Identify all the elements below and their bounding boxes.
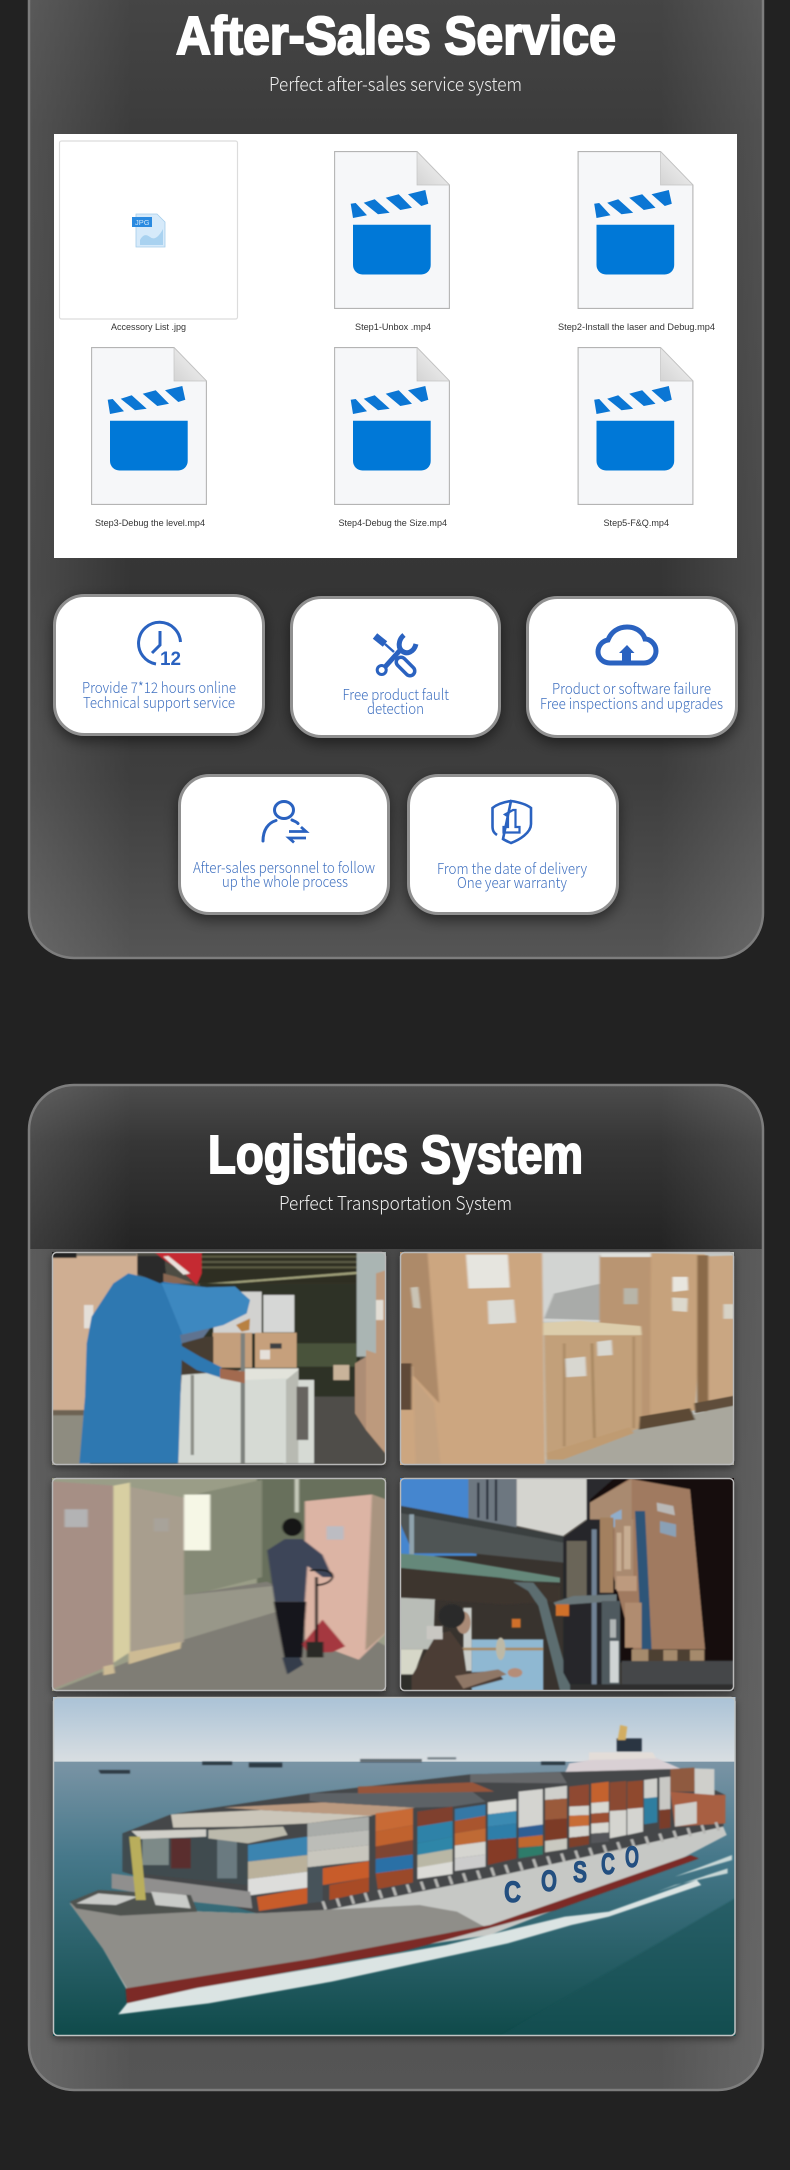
card text: up the whole process [222, 871, 348, 892]
card text: One year warranty [457, 872, 568, 893]
icon: person with arrows [263, 802, 306, 842]
title: Logistics System: Logistics System [208, 1125, 583, 1185]
icon: shield one [492, 801, 531, 843]
file: step 4: Step4-Debug the Size.mp4 [338, 518, 447, 529]
subtitle: Perfect Transportation System [279, 1189, 512, 1216]
icon: tools [375, 635, 416, 674]
file: step 1 [335, 152, 449, 333]
card text: Technical support service [83, 692, 235, 713]
file: step 5 [578, 348, 693, 529]
card: personnel follow up [180, 776, 388, 914]
icon: cloud upload [598, 627, 656, 665]
file: step 4 [335, 348, 449, 529]
subtitle: Perfect after-sales service system [269, 70, 522, 97]
panel: after-sales service [29, 0, 763, 958]
card text [82, 677, 236, 713]
icon: clock 12: 12 [160, 649, 181, 670]
ship name lettering: S [573, 1856, 587, 1889]
ship name lettering [504, 1841, 639, 1909]
photo: forklift loading crate [397, 1476, 737, 1693]
file: step 1: Step1-Unbox .mp4 [355, 322, 431, 333]
card: warranty [408, 776, 618, 914]
file: step 5: Step5-F&Q.mp4 [604, 518, 669, 529]
caption: Accessory List .jpg [111, 322, 186, 333]
file: step 3: Step3-Debug the level.mp4 [95, 518, 205, 529]
card text [437, 858, 588, 893]
card text: detection [367, 698, 424, 719]
file: step 2 [558, 152, 715, 333]
photo: worker with pallet truck [48, 1474, 391, 1693]
ship name lettering: C [601, 1848, 615, 1881]
panel: logistics system [29, 1085, 763, 2090]
card: technical support [54, 596, 264, 734]
card text: After-sales personnel to follow [193, 857, 375, 878]
card text: Free inspections and upgrades [540, 693, 723, 714]
icon: jpg file [132, 214, 165, 247]
panel background [29, 0, 763, 958]
ship name lettering: O [541, 1865, 557, 1898]
title: After-Sales Service: After-Sales Service [176, 6, 616, 66]
photo: worker strapping crates [50, 1250, 387, 1467]
ship name lettering: C [504, 1876, 521, 1909]
icon: jpg file: JPG [135, 218, 150, 227]
file: step 2: Step2-Install the laser and Debug.mp4 [558, 322, 715, 333]
panel: file listing [54, 134, 737, 558]
card text: Free product fault [342, 684, 450, 705]
card: software upgrades [528, 598, 736, 736]
ship name lettering: O [625, 1841, 639, 1874]
card: fault detection [292, 598, 500, 736]
card text [342, 684, 450, 719]
photo: container ship [53, 1697, 741, 2042]
card text [193, 857, 375, 892]
card text: Provide 7*12 hours online [82, 677, 236, 698]
card text: From the date of delivery [437, 858, 588, 879]
panel background [29, 1085, 763, 2090]
thumbnail: accessory list [60, 141, 238, 333]
card text [540, 678, 723, 714]
card text: Product or software failure [552, 678, 711, 699]
file: step 3 [92, 348, 206, 529]
icon: clock 12 [139, 622, 181, 670]
photo: stacked wooden crates [395, 1249, 738, 1468]
